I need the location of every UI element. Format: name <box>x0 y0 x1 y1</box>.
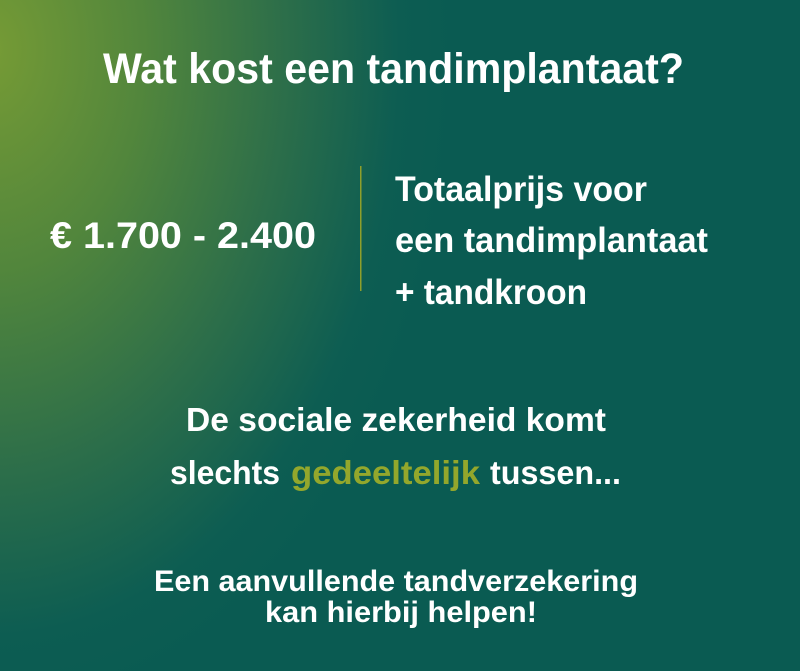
price description: + tandkroon <box>395 273 587 312</box>
vertical divider <box>360 166 362 291</box>
supplementary insurance call to action: kan hierbij helpen! <box>265 596 537 629</box>
price description: een tandimplantaat <box>395 221 708 260</box>
price description <box>395 170 708 312</box>
social security statement: De sociale zekerheid komt <box>186 401 606 438</box>
price range: € 1.700 - 2.400 <box>50 215 316 256</box>
price description: Totaalprijs voor <box>395 170 647 209</box>
social security statement: slechts <box>170 454 280 491</box>
supplementary insurance call to action <box>154 565 638 629</box>
supplementary insurance call to action: Een aanvullende tandverzekering <box>154 565 638 598</box>
social security statement <box>170 401 621 491</box>
social security statement: tussen... <box>490 454 621 491</box>
social security statement: gedeeltelijk <box>291 454 481 491</box>
title: Wat kost een tandimplantaat? <box>103 45 684 93</box>
